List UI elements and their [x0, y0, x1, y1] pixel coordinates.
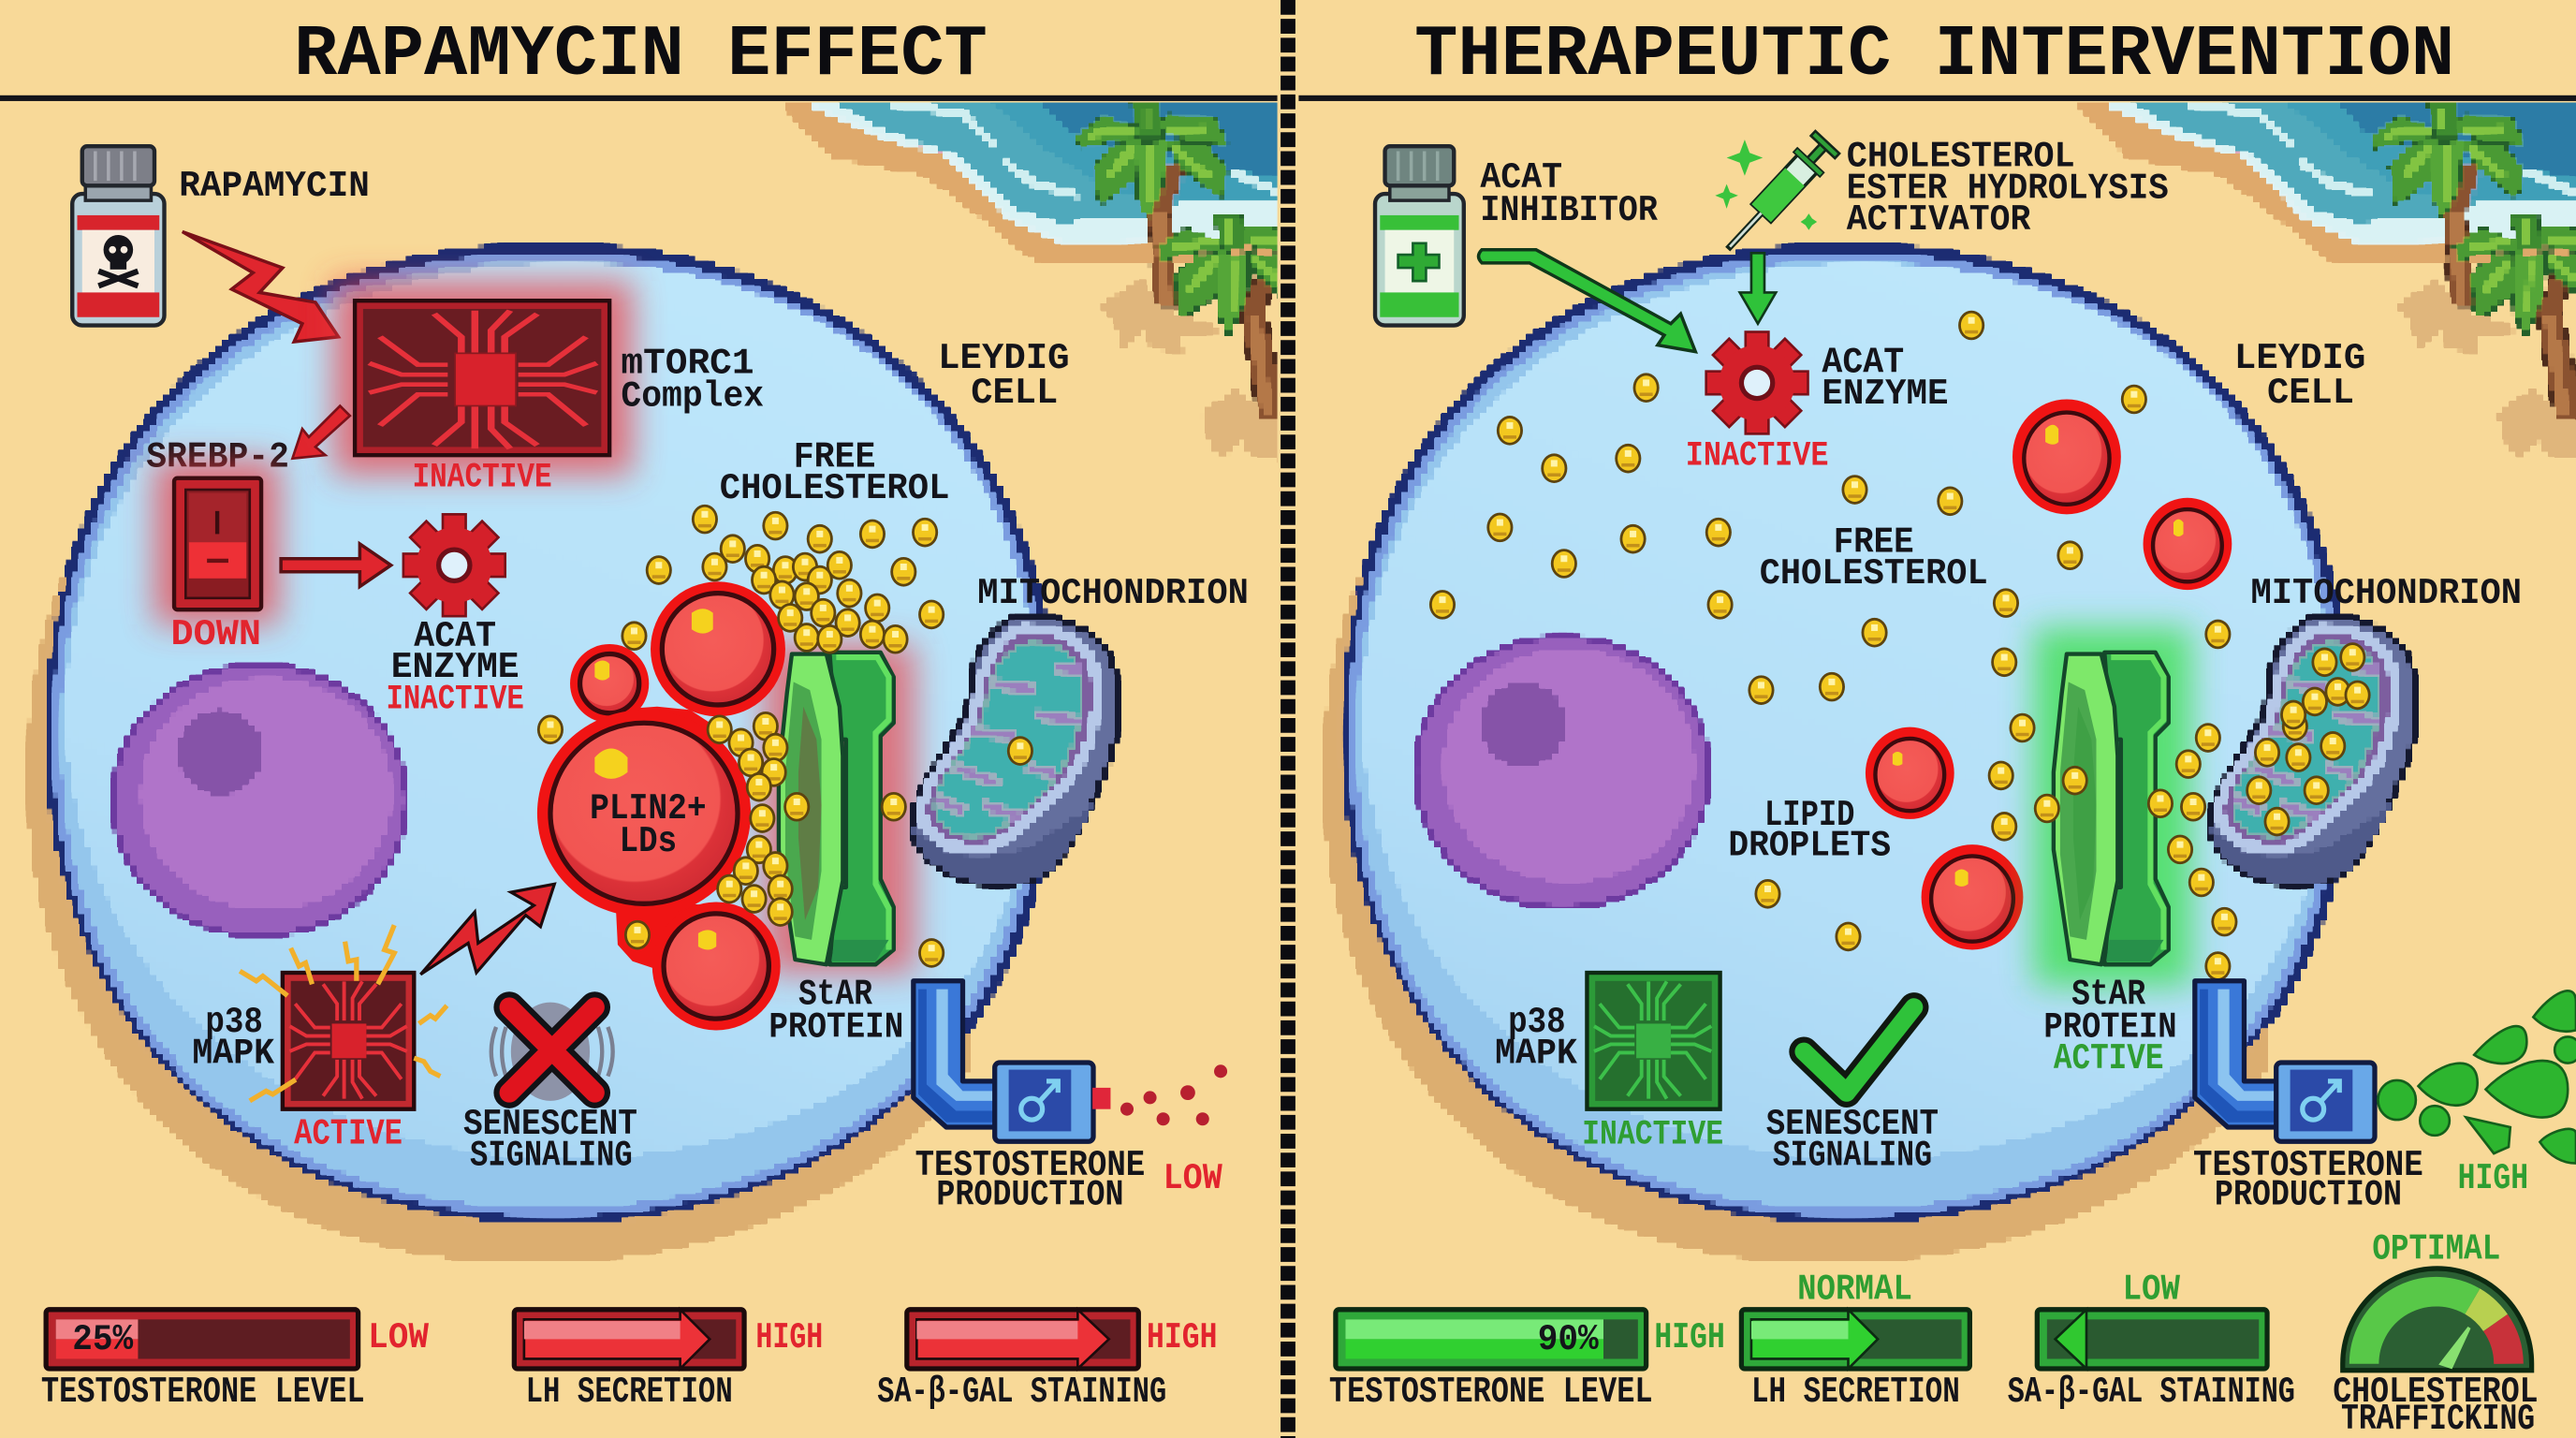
icon: senescent signaling blocked	[491, 1003, 613, 1101]
p38 MAPK active chip with sparks	[240, 925, 446, 1109]
status: low production: LOW	[1164, 1158, 1223, 1199]
bar: LH secretion normal	[1741, 1310, 1969, 1369]
label: testosterone level: TESTOSTERONE LEVEL	[1329, 1372, 1653, 1413]
beach scene with ocean and palms	[781, 102, 1314, 462]
label: free cholesterol: CHOLESTEROL	[1760, 553, 1988, 594]
label: testosterone production: PRODUCTION	[936, 1174, 1123, 1215]
label: free cholesterol	[1760, 522, 1988, 594]
label: rapamycin: RAPAMYCIN	[179, 166, 370, 207]
bar: SA-beta-gal staining low	[2037, 1310, 2267, 1369]
label: lipid droplets: DROPLETS	[1728, 826, 1891, 867]
label: Leydig cell: CELL	[2267, 373, 2354, 414]
label: PLIN2+ LDs: LDs	[620, 821, 677, 862]
label: cholesterol ester hydrolysis activator	[1847, 136, 2169, 241]
panel: rapamycin effect	[28, 15, 1314, 1413]
label: StAR protein	[768, 974, 903, 1048]
label: free cholesterol	[720, 436, 949, 509]
title: therapeutic intervention: THERAPEUTIC INTERVENTION	[1414, 15, 2454, 96]
label: ACAT inhibitor	[1480, 157, 1659, 231]
high testosterone drops	[2378, 990, 2576, 1164]
label: PLIN2+ LDs	[590, 788, 707, 862]
status: low staining: LOW	[2123, 1269, 2181, 1310]
label: mTORC1 Complex: Complex	[621, 376, 764, 418]
label: SA-beta-gal staining: SA-β-GAL STAINING	[877, 1372, 1166, 1413]
label: free cholesterol: CHOLESTEROL	[720, 468, 949, 509]
label: senescent signaling	[463, 1104, 637, 1176]
label: LH secretion: LH SECRETION	[526, 1372, 733, 1413]
label: ACAT enzyme: ENZYME	[1822, 374, 1949, 415]
status: high level: HIGH	[1654, 1317, 1725, 1358]
mitochondrion with cholesterol	[2211, 618, 2415, 884]
StAR protein active with green glow	[2034, 627, 2191, 986]
label: Leydig cell	[938, 338, 1070, 414]
label: testosterone level: TESTOSTERONE LEVEL	[41, 1372, 365, 1413]
status: high LH: HIGH	[755, 1317, 823, 1358]
label: p38 MAPK	[1495, 1002, 1578, 1075]
label: ACAT enzyme	[1822, 343, 1949, 415]
panel: therapeutic intervention	[1325, 15, 2576, 1438]
status: down: DOWN	[171, 614, 261, 655]
label: Leydig cell	[2234, 338, 2365, 414]
label: p38 MAPK: p38	[205, 1002, 263, 1043]
label: SREBP-2: SREBP-2	[146, 436, 289, 477]
label: Leydig cell: CELL	[971, 373, 1058, 414]
icon: ACAT enzyme gear	[1706, 332, 1808, 433]
lipid droplets small	[1866, 399, 2232, 949]
label: mTORC1 Complex	[621, 343, 764, 418]
header rule	[0, 95, 2576, 101]
label: senescent signaling: SIGNALING	[470, 1135, 633, 1176]
label: ACAT inhibitor: INHIBITOR	[1480, 190, 1659, 231]
beach scene with ocean and palms	[2076, 102, 2576, 462]
bar: testosterone level 25 percent: 25%	[72, 1319, 134, 1360]
label: LH secretion: LH SECRETION	[1751, 1372, 1960, 1413]
free cholesterol particles scattered	[1429, 311, 2371, 981]
leydig cell body	[28, 250, 1051, 1262]
arrow: SREBP-2 to ACAT	[281, 544, 391, 587]
label: free cholesterol: FREE	[1834, 522, 1914, 564]
status: high staining: HIGH	[1147, 1317, 1218, 1358]
bar: testosterone level 25 percent	[46, 1310, 359, 1369]
label: PLIN2+ LDs: PLIN2+	[590, 788, 707, 829]
gauge: cholesterol trafficking	[2343, 1269, 2532, 1371]
bar: LH secretion high	[514, 1310, 744, 1369]
status: active: ACTIVE	[294, 1114, 402, 1155]
nucleus	[111, 664, 407, 936]
label: ACAT enzyme inactive: INACTIVE	[386, 680, 524, 719]
bar: testosterone level 90 percent	[1336, 1310, 1647, 1369]
label: StAR protein: StAR	[798, 974, 873, 1015]
label: testosterone production: PRODUCTION	[2215, 1174, 2402, 1215]
status: p38 inactive: INACTIVE	[1582, 1116, 1723, 1155]
label: testosterone production: TESTOSTERONE	[915, 1145, 1145, 1186]
label: lipid droplets: LIPID	[1764, 795, 1855, 836]
arrow: mTORC1 to SREBP-2	[292, 406, 350, 459]
low testosterone drops	[1092, 1064, 1227, 1125]
label: mTORC1 Complex: mTORC1	[621, 343, 754, 384]
label: StAR protein active: PROTEIN	[2043, 1006, 2177, 1048]
label: ACAT enzyme inactive: ACAT	[414, 616, 496, 657]
label: senescent signaling: SENESCENT	[463, 1104, 637, 1145]
label: p38 MAPK: MAPK	[192, 1034, 275, 1075]
leydig cell body	[1325, 250, 2348, 1262]
StAR protein with red glow	[764, 644, 915, 973]
label: p38 MAPK: p38	[1508, 1002, 1566, 1043]
free cholesterol particles clustered	[537, 505, 1033, 968]
status: normal: NORMAL	[1797, 1269, 1912, 1310]
label: free cholesterol: FREE	[794, 436, 875, 477]
bar: testosterone level 90 percent: 90%	[1538, 1319, 1599, 1360]
mitochondrion	[914, 618, 1117, 884]
status: high production: HIGH	[2458, 1158, 2528, 1199]
arrow: syringe to ACAT enzyme	[1740, 253, 1776, 324]
label: Leydig cell: LEYDIG	[2234, 338, 2365, 379]
arrow: lightning from rapamycin to mTORC1	[183, 231, 339, 342]
icon: check mark	[1804, 1007, 1914, 1093]
label: senescent signaling: SENESCENT	[1766, 1104, 1939, 1145]
arrow: p38 to lipid droplets	[420, 884, 554, 975]
label: ACAT enzyme inactive: ENZYME	[391, 647, 520, 688]
label: ACAT inhibitor: ACAT	[1480, 157, 1562, 198]
label: testosterone production	[2193, 1145, 2423, 1215]
status: mTORC1 inactive: INACTIVE	[413, 459, 552, 498]
label: mitochondrion: MITOCHONDRION	[2250, 573, 2522, 614]
icon: syringe with sparkles	[1715, 130, 1840, 261]
center divider	[1278, 0, 1298, 1438]
lipid droplets PLIN2 plus	[537, 581, 785, 1030]
title: rapamycin effect: RAPAMYCIN EFFECT	[294, 15, 988, 96]
label: Leydig cell: LEYDIG	[938, 338, 1070, 379]
status: low level: LOW	[368, 1317, 430, 1358]
status: ACAT inactive: INACTIVE	[1686, 437, 1828, 477]
label: cholesterol trafficking: CHOLESTEROL	[2333, 1372, 2539, 1413]
bar: SA-beta-gal staining high	[907, 1310, 1138, 1369]
label: StAR protein active: ACTIVE	[2054, 1038, 2163, 1079]
status: optimal: OPTIMAL	[2372, 1228, 2500, 1269]
switch: SREBP-2 down	[154, 460, 279, 624]
p38 MAPK inactive chip	[1587, 973, 1720, 1109]
label: StAR protein: PROTEIN	[768, 1006, 903, 1048]
testosterone pipe	[2195, 981, 2375, 1141]
label: mitochondrion: MITOCHONDRION	[977, 573, 1249, 614]
icon: ACAT inhibitor vial	[1375, 146, 1464, 326]
label: StAR protein active: StAR	[2071, 974, 2146, 1015]
label: cholesterol trafficking	[2333, 1372, 2539, 1438]
label: StAR protein active	[2043, 974, 2177, 1079]
nucleus	[1414, 636, 1710, 909]
label: lipid droplets	[1728, 795, 1891, 867]
label: ACAT enzyme inactive	[386, 616, 524, 719]
label: cholesterol ester hydrolysis activator: ESTER HYDROLYSIS	[1847, 168, 2169, 209]
label: senescent signaling	[1766, 1104, 1939, 1176]
label: testosterone production: TESTOSTERONE	[2193, 1145, 2423, 1186]
label: cholesterol ester hydrolysis activator: ACTIVATOR	[1847, 199, 2031, 241]
icon: rapamycin vial with skull	[72, 146, 165, 326]
label: p38 MAPK: MAPK	[1495, 1034, 1578, 1075]
label: ACAT enzyme: ACAT	[1822, 343, 1904, 384]
testosterone pipe	[914, 981, 1093, 1141]
mTORC1 complex chip	[333, 281, 633, 475]
label: testosterone production	[915, 1145, 1145, 1215]
label: p38 MAPK	[192, 1002, 275, 1075]
label: SA-beta-gal staining: SA-β-GAL STAINING	[2008, 1372, 2295, 1413]
arrow: inhibitor to ACAT enzyme	[1479, 250, 1695, 352]
icon: ACAT enzyme gear	[403, 514, 505, 616]
label: senescent signaling: SIGNALING	[1773, 1135, 1932, 1176]
label: cholesterol ester hydrolysis activator: CHOLESTEROL	[1847, 136, 2075, 177]
